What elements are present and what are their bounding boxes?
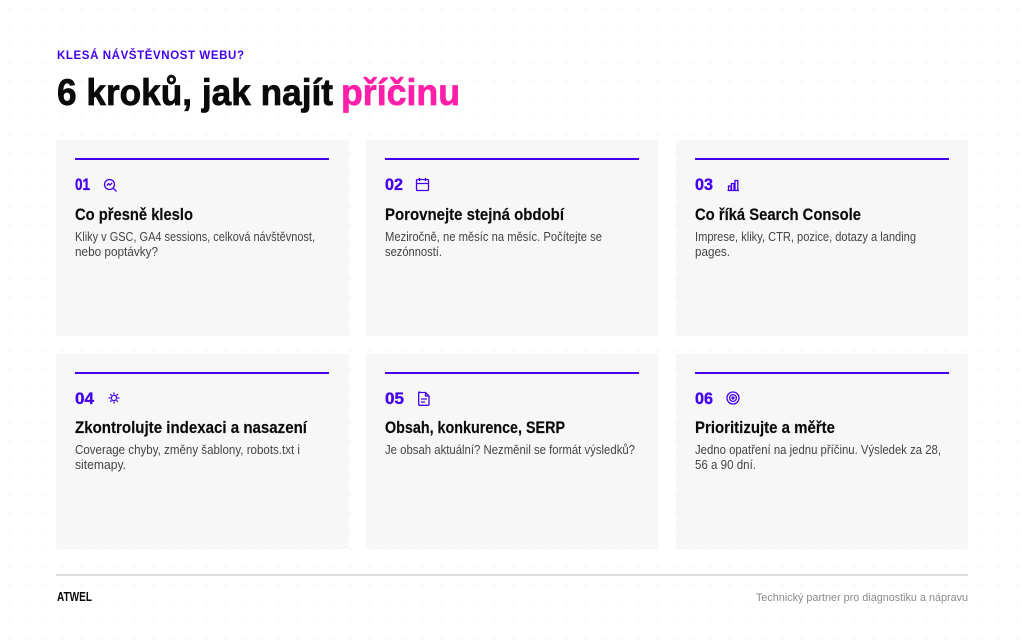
icon: document xyxy=(419,392,429,405)
step 05 heading: Obsah, konkurence, SERP xyxy=(385,419,565,437)
step 04 description: Coverage chyby, změny šablony, robots.txt i xyxy=(75,443,300,457)
step 05 description: Je obsah aktuální? Nezměnil se formát výsledků? xyxy=(385,443,635,457)
step number 03: 03 xyxy=(695,175,713,194)
step 02 description: sezónností. xyxy=(385,245,442,259)
step 06 description: 56 a 90 dní. xyxy=(695,458,756,472)
panel: step 05 xyxy=(366,354,658,549)
step 03 description: pages. xyxy=(695,245,730,259)
step 02 heading: Porovnejte stejná období xyxy=(385,206,565,224)
icon: sun gear xyxy=(108,392,120,404)
step number 01: 01 xyxy=(75,175,90,194)
footer tagline: Technický partner pro diagnostiku a nápravu xyxy=(756,592,968,604)
panel: step 02 xyxy=(366,140,658,336)
title: 6 kroků, jak najít xyxy=(57,72,333,113)
icon: target xyxy=(727,392,739,404)
step 01 heading: Co přesně kleslo xyxy=(75,206,193,224)
step 04 heading: Zkontrolujte indexaci a nasazení xyxy=(75,419,308,437)
icon: bar chart xyxy=(728,180,739,190)
step 03 heading: Co říká Search Console xyxy=(695,206,861,224)
step 02 description xyxy=(385,230,602,259)
step 06 description: Jedno opatření na jednu příčinu. Výsledek za 28, xyxy=(695,443,941,457)
step 03 description xyxy=(695,230,916,259)
step 06 description xyxy=(695,443,941,472)
icon: calendar xyxy=(416,178,428,190)
icon: magnifier with trend xyxy=(104,180,116,192)
step 06 heading: Prioritizujte a měřte xyxy=(695,419,835,437)
step 01 description: Kliky v GSC, GA4 sessions, celková návštěvnost, xyxy=(75,230,315,244)
step number 02: 02 xyxy=(385,175,403,194)
panel: step 01 xyxy=(56,140,349,336)
logo: ATWEL: ATWEL xyxy=(57,589,92,604)
step number 05: 05 xyxy=(385,389,404,408)
step 04 description xyxy=(75,443,300,472)
step 03 description: Imprese, kliky, CTR, pozice, dotazy a landing xyxy=(695,230,916,244)
panel: step 03 xyxy=(676,140,968,336)
eyebrow heading: KLESÁ NÁVŠTĚVNOST WEBU? xyxy=(57,49,244,62)
step 04 description: sitemapy. xyxy=(75,458,126,472)
step number 04: 04 xyxy=(75,389,95,408)
step 02 description: Meziročně, ne měsíc na měsíc. Počítejte se xyxy=(385,230,602,244)
step number 06: 06 xyxy=(695,389,713,408)
step 01 description xyxy=(75,230,315,259)
panel: step 06 xyxy=(676,354,968,549)
title: příčinu xyxy=(341,72,460,113)
step 01 description: nebo poptávky? xyxy=(75,245,158,259)
panel: step 04 xyxy=(56,354,349,549)
